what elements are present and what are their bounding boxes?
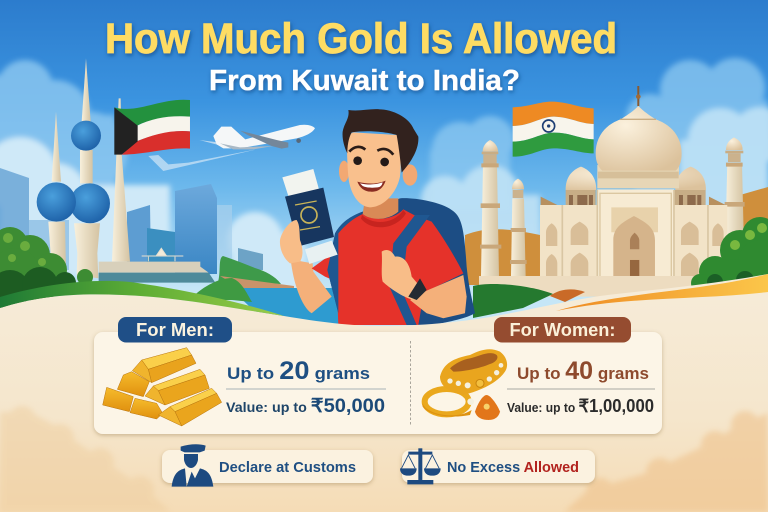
title: How Much Gold Is Allowed <box>105 15 617 63</box>
watch <box>408 278 427 300</box>
men limit text: Value: up to ₹50,000 <box>226 396 385 417</box>
icon: gold jewellery <box>423 349 507 420</box>
tree right <box>691 217 768 292</box>
illustration: Taj Mahal <box>479 86 745 297</box>
icon: Kuwait towers <box>37 58 215 283</box>
no excess chip <box>402 450 595 483</box>
clouds right <box>421 58 768 255</box>
hills behind Taj <box>465 187 768 285</box>
icon: airplane <box>148 125 315 171</box>
backpack straps <box>327 212 430 325</box>
icon: balance scale <box>400 448 441 484</box>
left hand <box>280 220 302 263</box>
icon: customs officer <box>172 444 213 487</box>
men section pill: For Men: <box>136 320 214 340</box>
passport <box>285 188 334 246</box>
men limit text: Up to 20 grams <box>227 357 370 385</box>
customs chip: Declare at Customs <box>219 459 356 476</box>
women limit text <box>507 357 655 416</box>
clouds left <box>0 60 307 293</box>
women section pill: For Women: <box>510 320 616 340</box>
women section pill <box>494 317 631 342</box>
orange ribbon <box>556 274 768 311</box>
skyline buildings <box>0 168 263 274</box>
red shirt <box>312 209 463 325</box>
no excess chip: No Excess Allowed <box>447 459 579 476</box>
right arm and fist <box>410 275 467 318</box>
women limit text: Value: up to ₹1,00,000 <box>507 396 654 416</box>
cream wave panel <box>0 274 768 512</box>
left arm <box>291 259 332 313</box>
main dome <box>596 86 682 188</box>
green ribbon <box>0 281 284 316</box>
eyes and brows <box>349 147 393 166</box>
platform <box>479 276 706 297</box>
icon: Kuwait flag <box>114 100 190 155</box>
left minarets <box>480 140 527 277</box>
bottom clouds right <box>564 411 768 512</box>
side chattris and small domes <box>541 167 726 205</box>
sky background <box>0 0 768 340</box>
ears <box>339 161 417 186</box>
tree left <box>0 227 93 310</box>
men limit text <box>226 357 386 417</box>
face <box>347 132 401 207</box>
women limit text: Up to 40 grams <box>517 357 649 385</box>
main building <box>540 189 727 277</box>
men section pill <box>118 317 232 342</box>
icon: India flag <box>513 102 594 157</box>
dashed divider <box>410 341 412 425</box>
neck <box>363 198 398 219</box>
panel: gold allowance card <box>94 332 662 434</box>
subtitle: From Kuwait to India? <box>209 65 520 97</box>
boarding pass <box>282 169 319 199</box>
customs chip <box>162 450 373 483</box>
character: traveller with passport <box>280 109 475 325</box>
icon: gold bars <box>103 348 222 426</box>
backpack <box>327 198 475 325</box>
smile <box>357 181 386 192</box>
right minaret <box>725 137 745 246</box>
shrubs and shoreline <box>190 256 585 326</box>
bottom clouds left <box>0 406 171 512</box>
hair <box>343 109 418 173</box>
